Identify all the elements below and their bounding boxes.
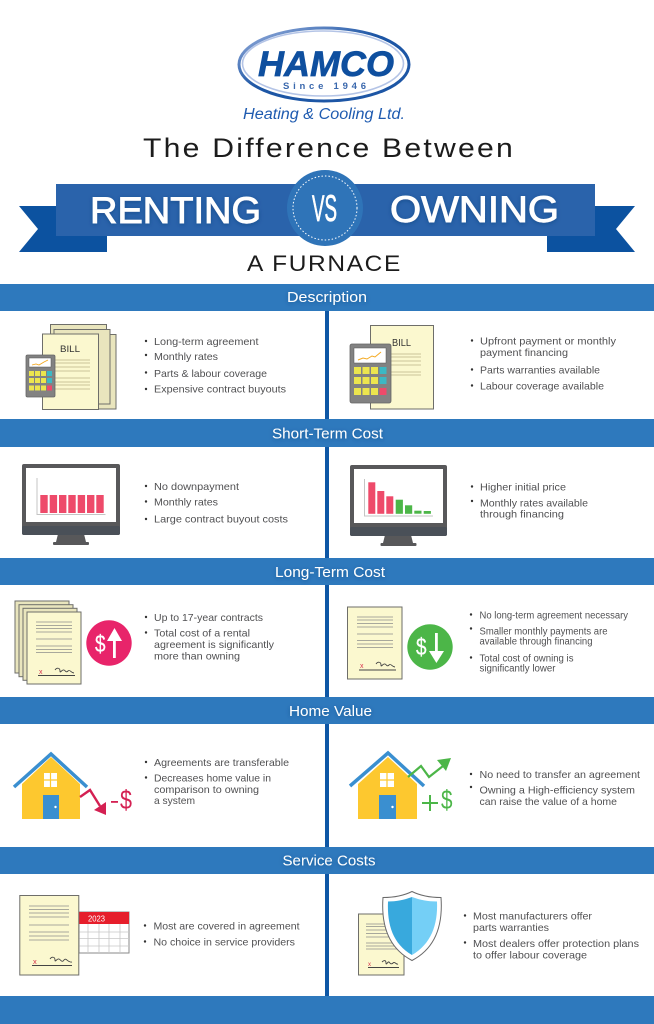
panel: service costs owning <box>358 892 639 975</box>
icon: stacked bills with calculator <box>26 324 116 410</box>
header band: Long-Term Cost <box>0 558 654 585</box>
icon: cost up circle <box>86 620 132 666</box>
text: service costs owning bullets: Most dealers offer protection plans <box>473 939 639 950</box>
icon: stacked bills with calculator: BILL <box>60 344 80 355</box>
text: short-term renting bullets: Monthly rates <box>154 498 218 508</box>
header band: Short-Term Cost <box>0 419 654 447</box>
text: short-term renting bullets: No downpayment <box>154 482 239 493</box>
panel: long-term renting <box>15 601 275 684</box>
icon: cost up circle: $ <box>95 631 106 658</box>
icon: cost down circle: $ <box>416 634 426 661</box>
text: service costs owning bullets: parts warranties <box>473 923 549 934</box>
text: description renting bullets <box>145 337 286 396</box>
logo: HAMCO: Since 1946 <box>283 81 366 92</box>
text: short-term owning bullets: through financing <box>480 510 564 520</box>
ribbon banner: Renting vs Owning: RENTING <box>90 190 261 231</box>
panel: home value renting <box>14 754 289 819</box>
icon: contract with calendar: 2023 <box>88 914 106 924</box>
text: long-term owning bullets: available through financing <box>480 636 592 648</box>
icon: contract with shield: x <box>368 962 371 968</box>
icon: contract: x <box>360 663 364 670</box>
icon: monitor with falling bar chart <box>350 465 447 546</box>
text: service costs renting bullets: Most are covered in agreement <box>154 922 300 932</box>
text: description renting bullets: Long-term agreement <box>154 337 259 348</box>
icon: bill with calculator: BILL <box>392 338 411 349</box>
center divider <box>325 311 329 997</box>
icon: contract <box>348 607 402 679</box>
text: short-term renting bullets <box>145 482 288 526</box>
panel: service costs renting <box>20 896 300 975</box>
panel: description renting <box>26 324 286 410</box>
icon: house with falling arrow: $ <box>120 785 132 815</box>
text: long-term owning bullets <box>470 610 628 674</box>
text: long-term owning bullets: significantly lower <box>480 664 556 674</box>
text: description renting bullets: Parts & labour coverage <box>154 369 267 380</box>
panel: description owning <box>350 326 617 409</box>
icon: contract with shield <box>358 892 441 975</box>
text: home value renting bullets: comparison to owning <box>154 785 259 796</box>
text: home value renting bullets: Decreases home value in <box>154 774 271 784</box>
logo: HAMCO: HAMCO <box>258 45 394 84</box>
text: long-term owning bullets: Smaller monthly payments are <box>480 626 608 638</box>
text: description owning bullets <box>471 336 617 392</box>
text: home value owning bullets: No need to transfer an agreement <box>480 770 640 781</box>
title: The Difference Between: The Difference Between <box>143 133 515 163</box>
panel: short-term renting <box>22 464 288 545</box>
icon: house with falling arrow <box>14 754 132 819</box>
icon: stacked contracts <box>15 601 81 684</box>
header band: Description: Description <box>287 290 367 306</box>
icon: contract with calendar <box>20 896 129 975</box>
icon: bill with calculator <box>350 326 434 409</box>
icon: house with rising arrow <box>350 753 452 819</box>
icon: contract with calendar: x <box>33 957 37 966</box>
text: service costs owning bullets: to offer labour coverage <box>473 950 587 962</box>
text: home value owning bullets: Owning a High-efficiency system <box>480 786 635 796</box>
text: description owning bullets: payment financing <box>480 348 568 359</box>
text: short-term renting bullets: Large contract buyout costs <box>154 514 288 526</box>
text: home value renting bullets: Agreements are transferable <box>154 758 289 769</box>
panel: home value owning <box>350 753 640 819</box>
text: short-term owning bullets: Higher initial price <box>480 482 566 494</box>
text: long-term renting bullets <box>145 613 275 662</box>
header band: Service Costs: Service Costs <box>282 854 376 870</box>
text: service costs owning bullets <box>464 912 639 962</box>
text: description owning bullets: Upfront payment or monthly <box>480 336 617 348</box>
ribbon banner: Renting vs Owning: OWNING <box>390 189 559 230</box>
panel: long-term owning <box>348 607 628 679</box>
text: home value owning bullets <box>470 770 640 808</box>
header band: Description <box>0 284 654 311</box>
text: service costs renting bullets <box>144 922 300 948</box>
text: long-term owning bullets: No long-term agreement necessary <box>480 610 628 622</box>
logo: HAMCO: Heating & Cooling Ltd. <box>243 106 405 123</box>
text: home value renting bullets: a system <box>154 796 195 807</box>
text: service costs owning bullets: Most manufacturers offer <box>473 912 593 922</box>
header band: Long-Term Cost: Long-Term Cost <box>275 565 385 581</box>
footer band <box>0 996 654 1024</box>
icon: monitor with flat bar chart <box>22 464 120 545</box>
header band: Home Value: Home Value <box>289 704 372 720</box>
ribbon banner: Renting vs Owning: VS <box>312 188 337 229</box>
text: short-term owning bullets: Monthly rates available <box>480 498 588 510</box>
text: description renting bullets: Monthly rates <box>154 352 218 363</box>
logo: HAMCO <box>239 28 409 123</box>
text: long-term renting bullets: more than owning <box>154 652 240 662</box>
icon: house with rising arrow: $ <box>441 785 452 815</box>
ribbon banner: Renting vs Owning <box>19 170 635 252</box>
icon: cost down circle <box>407 624 453 670</box>
panel: short-term owning <box>350 465 588 546</box>
text: description owning bullets: Labour coverage available <box>480 382 604 392</box>
header band: Service Costs <box>0 847 654 874</box>
text: long-term renting bullets: Total cost of a rental <box>154 628 250 640</box>
text: description owning bullets: Parts warranties available <box>480 366 600 376</box>
text: long-term renting bullets: agreement is significantly <box>154 640 275 651</box>
header band: Short-Term Cost: Short-Term Cost <box>272 426 383 442</box>
text: home value renting bullets <box>145 758 289 807</box>
text: long-term owning bullets: Total cost of owning is <box>480 654 574 664</box>
text: long-term renting bullets: Up to 17-year contracts <box>154 613 263 624</box>
subtitle: A Furnace: A FURNACE <box>247 251 402 276</box>
header band: Home Value <box>0 697 654 724</box>
icon: stacked contracts: x <box>39 669 43 676</box>
text: service costs renting bullets: No choice in service providers <box>154 938 295 948</box>
text: home value owning bullets: can raise the value of a home <box>480 797 617 808</box>
text: description renting bullets: Expensive contract buyouts <box>154 384 286 396</box>
text: short-term owning bullets <box>471 482 588 520</box>
